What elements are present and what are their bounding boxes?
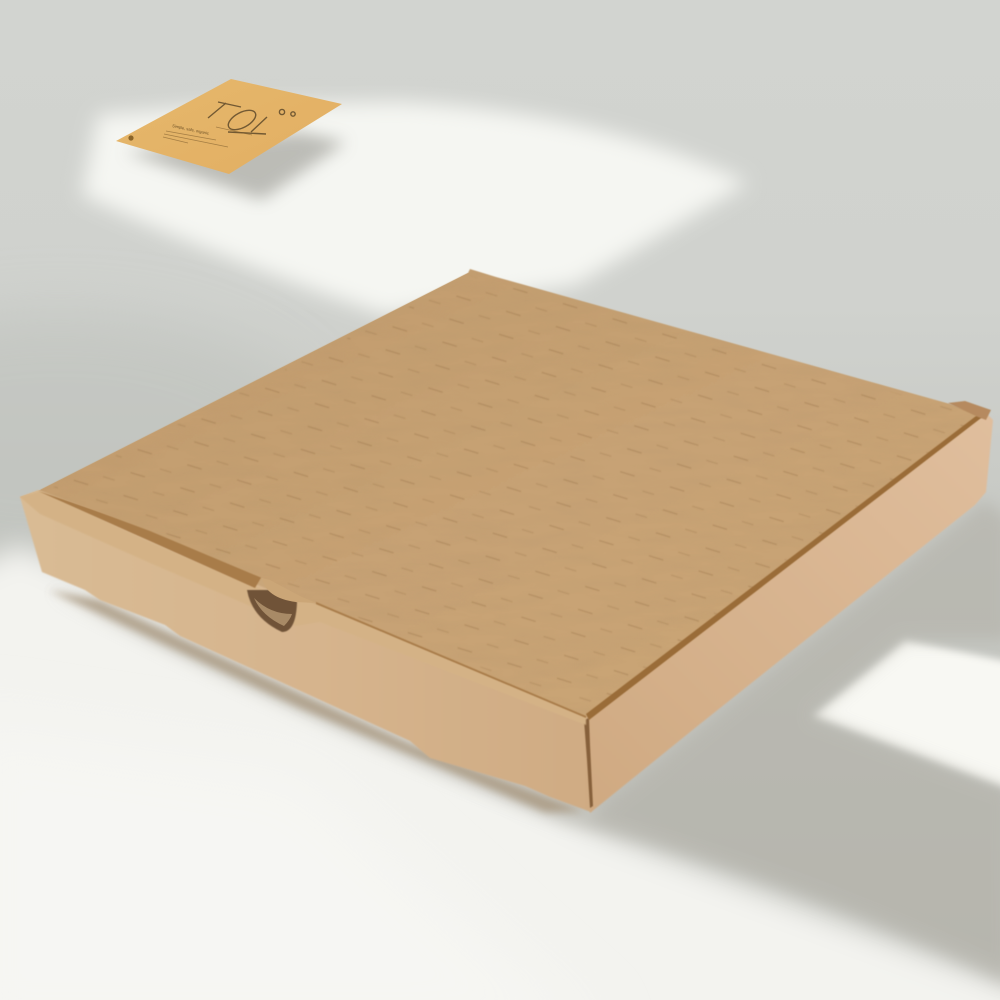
card small print	[163, 127, 252, 147]
notch inner fold	[254, 598, 292, 626]
lid top	[40, 269, 982, 717]
light patch: right window	[812, 640, 1000, 790]
card sheet	[116, 79, 342, 174]
notch cutout	[247, 590, 297, 632]
card punch hole	[128, 135, 134, 141]
box base fill	[20, 273, 982, 720]
front side panel	[20, 490, 591, 812]
light patch: floor	[0, 545, 1000, 1000]
notch tab	[262, 578, 316, 603]
thin groove, front right	[316, 602, 586, 718]
pizza box	[20, 260, 993, 813]
wall shading: left side	[0, 310, 320, 570]
corner seam	[584, 718, 593, 808]
folded lip, front	[20, 491, 586, 725]
right lid edge groove	[586, 413, 985, 720]
floating card shadow	[125, 132, 346, 200]
cast shadow under box	[50, 500, 1000, 985]
card label text: Simple, safe, organic	[172, 123, 209, 136]
light patch: upper window	[82, 102, 748, 315]
contact shadow at box base	[48, 590, 585, 812]
corrugation flutes	[50, 276, 975, 712]
right side panel	[586, 412, 993, 813]
lid paper grain	[30, 260, 990, 730]
inner groove, front	[38, 491, 262, 588]
floating card	[116, 79, 342, 174]
far corner flap	[948, 401, 991, 420]
card wordmark	[208, 102, 295, 134]
thumb notch	[247, 578, 316, 632]
